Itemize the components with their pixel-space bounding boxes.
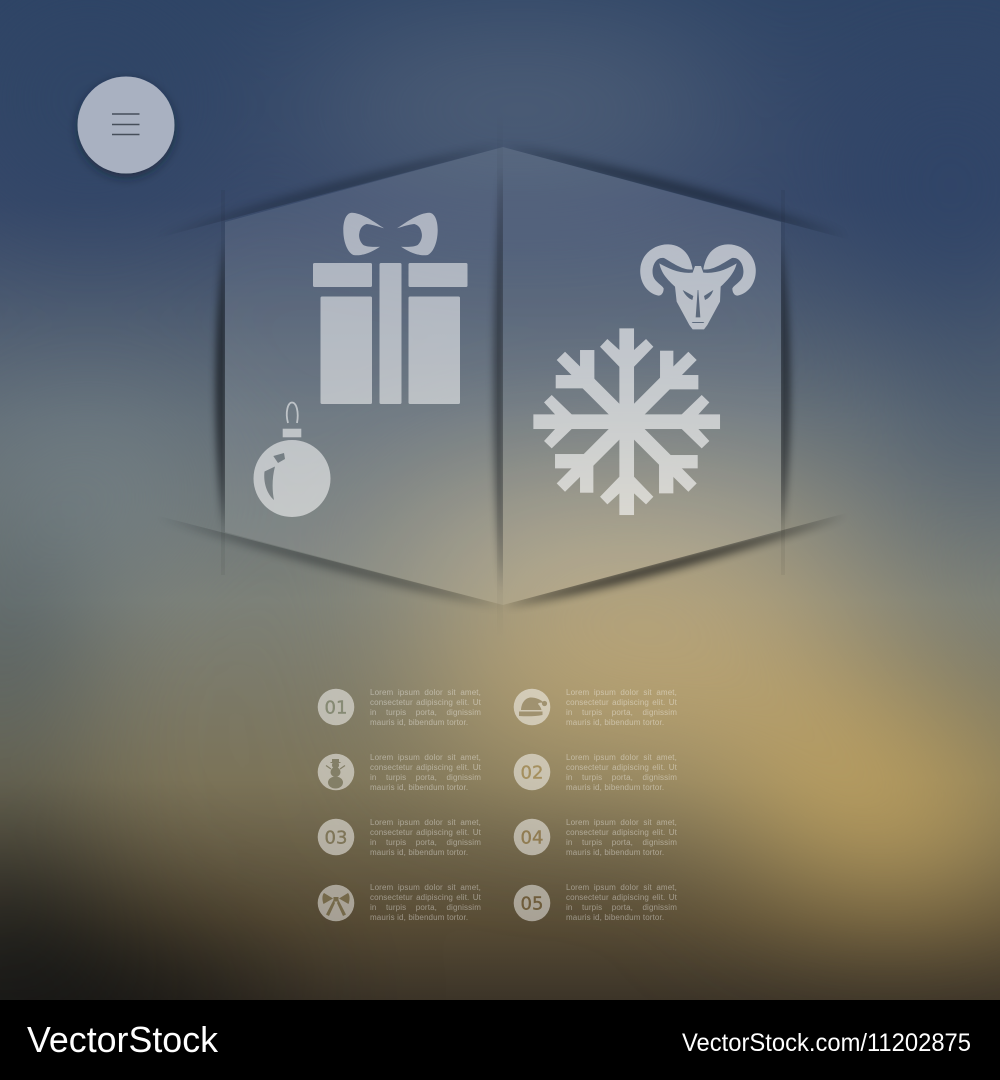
text block 6: mauris id, bibendum tortor. bbox=[566, 848, 664, 857]
badge: 01 bbox=[318, 689, 354, 725]
text block 4: consectetur adipiscing elit. Ut bbox=[566, 763, 677, 772]
fold shadow: centre edge bbox=[494, 170, 503, 590]
icon: ram head bbox=[640, 244, 756, 329]
footer bar bbox=[0, 1000, 1000, 1080]
badge: 04: 04 bbox=[521, 828, 543, 848]
text block 8 bbox=[566, 883, 677, 922]
icon: bauble bbox=[254, 402, 331, 517]
text block 5: consectetur adipiscing elit. Ut bbox=[370, 828, 481, 837]
fold shadow: bottom left bbox=[181, 522, 494, 607]
text block 7: mauris id, bibendum tortor. bbox=[370, 913, 468, 922]
text block 5: in turpis porta, dignissim bbox=[370, 838, 481, 847]
fold shadow: top right bbox=[521, 148, 825, 232]
fold shadow: top left bbox=[194, 150, 480, 228]
badge: 02 bbox=[514, 754, 550, 790]
text block 4: in turpis porta, dignissim bbox=[566, 773, 677, 782]
text block 5: mauris id, bibendum tortor. bbox=[370, 848, 468, 857]
icon: snowflake bbox=[533, 328, 720, 515]
text block 1: in turpis porta, dignissim bbox=[370, 708, 481, 717]
text block 2 bbox=[566, 688, 677, 727]
text block 3 bbox=[370, 753, 481, 792]
text block 1 bbox=[370, 688, 481, 727]
text block 2: in turpis porta, dignissim bbox=[566, 708, 677, 717]
text block 2: Lorem ipsum dolor sit amet, bbox=[566, 688, 677, 697]
badge: 05: 05 bbox=[521, 894, 543, 914]
fold shadow: left edge bbox=[216, 240, 225, 530]
text block 3: mauris id, bibendum tortor. bbox=[370, 783, 468, 792]
badge: santa hat bbox=[514, 689, 550, 725]
text block 6: Lorem ipsum dolor sit amet, bbox=[566, 818, 677, 827]
fold shadow: right edge bbox=[781, 240, 790, 530]
badge: 02: 02 bbox=[521, 762, 543, 784]
badge: snowman bbox=[318, 754, 354, 790]
text block 8: mauris id, bibendum tortor. bbox=[566, 913, 664, 922]
menu button bbox=[78, 76, 174, 174]
text block 7: Lorem ipsum dolor sit amet, bbox=[370, 883, 481, 892]
text block 4: mauris id, bibendum tortor. bbox=[566, 783, 664, 792]
text block 8: consectetur adipiscing elit. Ut bbox=[566, 893, 677, 902]
fold shadow: bottom right bbox=[503, 514, 845, 605]
text block 7: in turpis porta, dignissim bbox=[370, 903, 481, 912]
text block 5 bbox=[370, 818, 481, 857]
text block 7 bbox=[370, 883, 481, 922]
panel: folded sheet bbox=[181, 147, 834, 609]
text block 1: mauris id, bibendum tortor. bbox=[370, 718, 468, 727]
badge: bow bbox=[318, 885, 354, 921]
text block 8: Lorem ipsum dolor sit amet, bbox=[566, 883, 677, 892]
text block 8: in turpis porta, dignissim bbox=[566, 903, 677, 912]
text block 6: consectetur adipiscing elit. Ut bbox=[566, 828, 677, 837]
badge: 03 bbox=[318, 819, 354, 855]
badge: 04 bbox=[514, 819, 550, 855]
footer brand: VectorStock bbox=[27, 1019, 219, 1060]
text block 4: Lorem ipsum dolor sit amet, bbox=[566, 753, 677, 762]
text block 3: in turpis porta, dignissim bbox=[370, 773, 481, 782]
badge: 05 bbox=[514, 885, 550, 921]
badge: 03: 03 bbox=[325, 828, 347, 848]
text block 3: consectetur adipiscing elit. Ut bbox=[370, 763, 481, 772]
text block 6: in turpis porta, dignissim bbox=[566, 838, 677, 847]
text block 7: consectetur adipiscing elit. Ut bbox=[370, 893, 481, 902]
text block 5: Lorem ipsum dolor sit amet, bbox=[370, 818, 481, 827]
text block 3: Lorem ipsum dolor sit amet, bbox=[370, 753, 481, 762]
icon: gift box bbox=[313, 213, 468, 404]
footer image id: VectorStock.com/11202875 bbox=[682, 1029, 971, 1057]
fold guide strips bbox=[221, 110, 785, 640]
text block 2: consectetur adipiscing elit. Ut bbox=[566, 698, 677, 707]
text block 4 bbox=[566, 753, 677, 792]
text block 2: mauris id, bibendum tortor. bbox=[566, 718, 664, 727]
text block 6 bbox=[566, 818, 677, 857]
text block 1: consectetur adipiscing elit. Ut bbox=[370, 698, 481, 707]
text block 1: Lorem ipsum dolor sit amet, bbox=[370, 688, 481, 697]
badge: 01: 01 bbox=[325, 698, 347, 718]
